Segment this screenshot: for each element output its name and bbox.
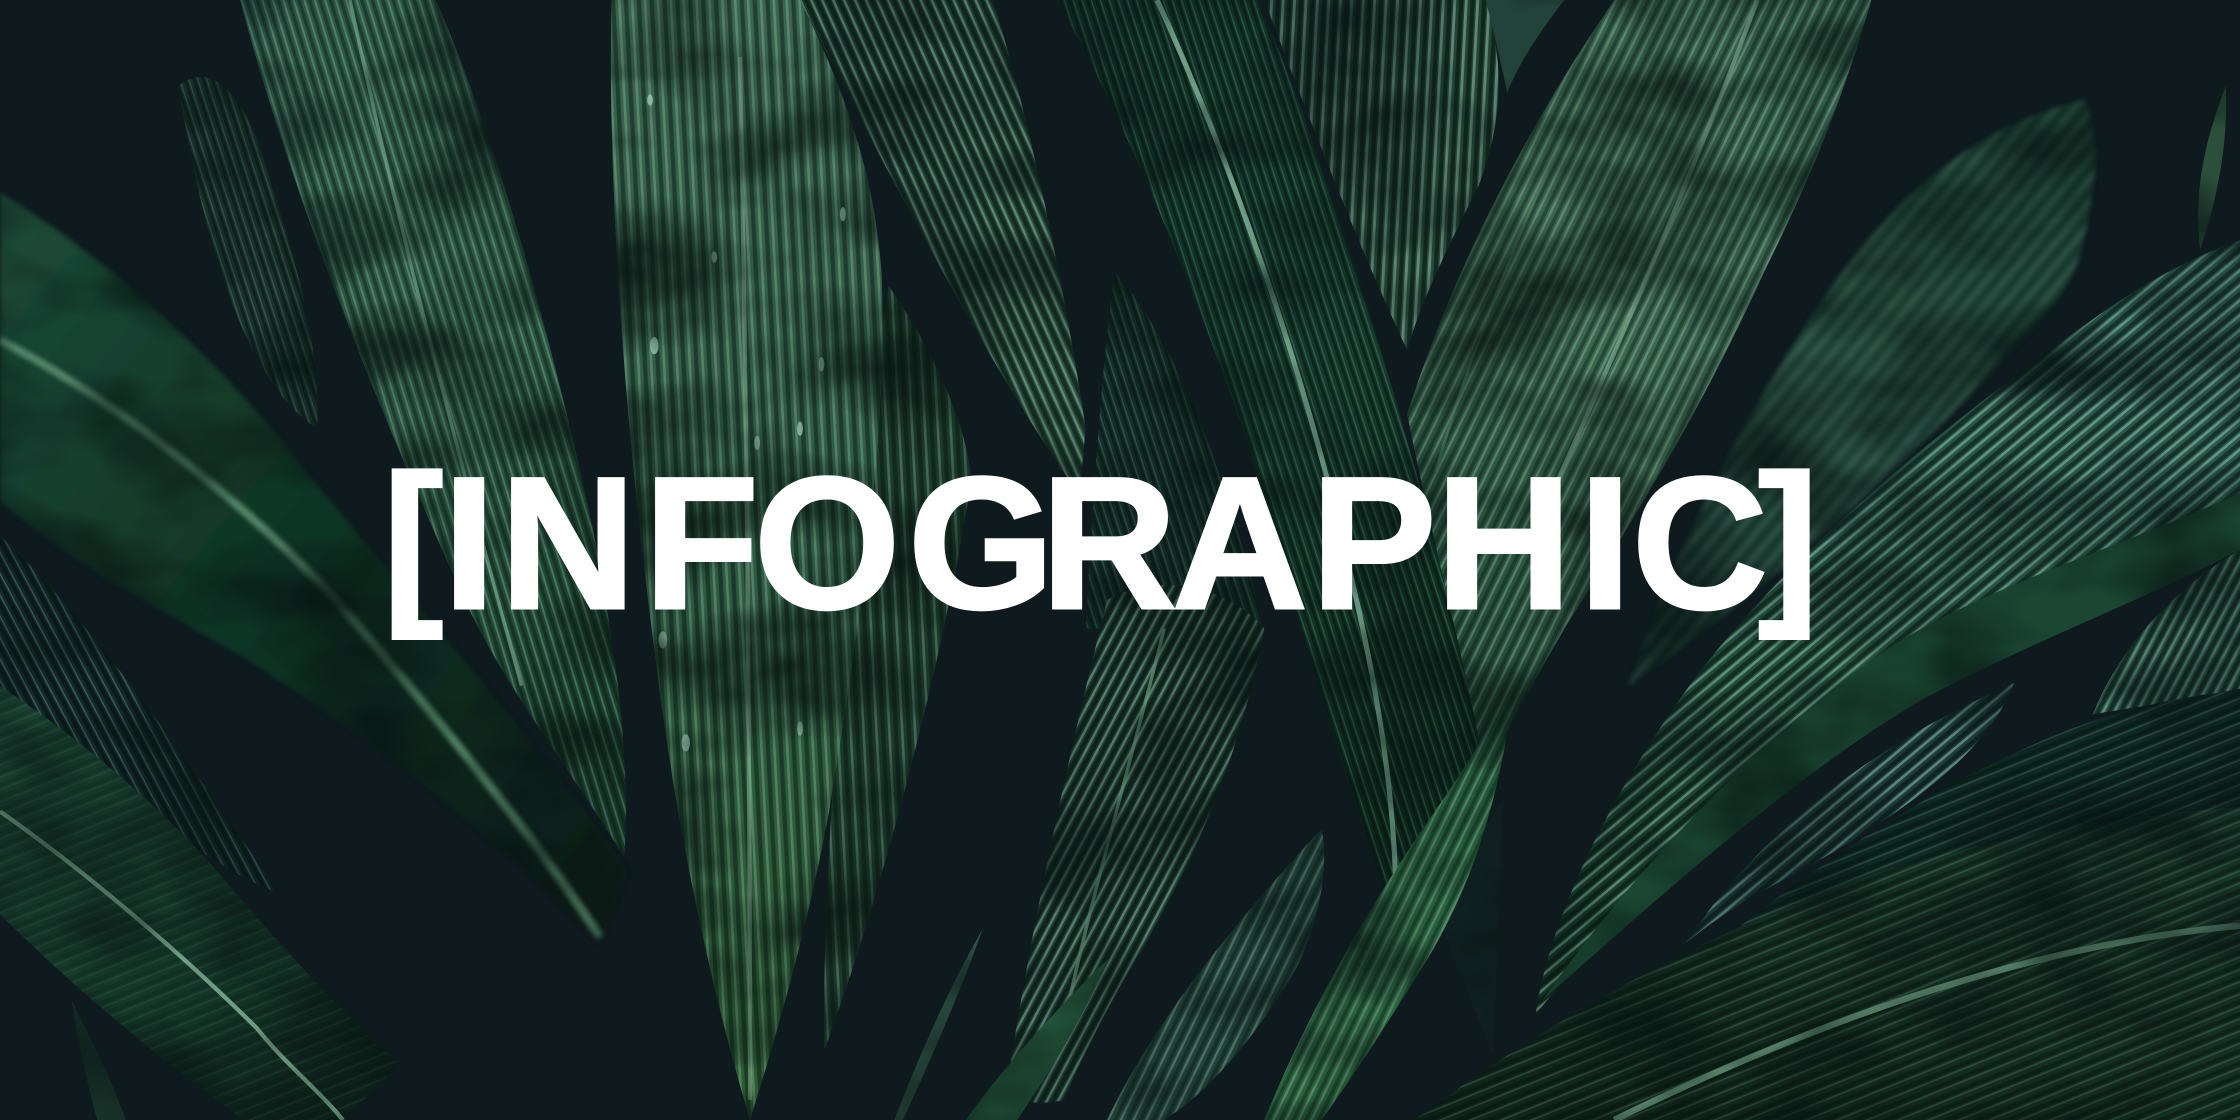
leaf: faint upper-left blade — [179, 77, 318, 429]
leaf: centre lower fan blade — [1007, 585, 1264, 1103]
leaf: bottom-right large blade — [1414, 807, 2240, 1120]
leaf: thin stem top right — [2198, 86, 2226, 250]
leaf: dark blade with light stripes, top centre — [800, 0, 1086, 493]
leaf: large left blade — [0, 193, 629, 943]
title: C — [1632, 438, 1768, 648]
leaf: large right striped blade — [1536, 240, 2240, 1014]
leaf: tall centre-left blade with droplets — [611, 0, 883, 1120]
title: N — [500, 438, 636, 648]
leaf: dark arched blade far lower right — [1686, 691, 2240, 971]
leaf: dim centre back blade — [1086, 271, 1264, 629]
leaf: bottom-left stem fragment — [71, 1000, 126, 1120]
leaf: blurred right blade — [1629, 100, 2095, 686]
title: [ — [383, 438, 443, 640]
leaf: lower centre small blade — [1107, 829, 1324, 1120]
title: H — [1436, 438, 1572, 648]
leaf: bottom-left blade — [0, 686, 400, 1120]
leaf: faint lower-left blade — [0, 536, 279, 893]
title: G — [908, 438, 1054, 648]
droplets — [647, 94, 846, 751]
title: P — [1311, 438, 1436, 648]
leaf: dim stem behind lower centre — [1429, 800, 1503, 1057]
leaf: top-right striped blade — [1264, 0, 1499, 350]
title: A — [1172, 438, 1308, 648]
leaf: thin green blade bottom centre — [966, 960, 1107, 1120]
leaf: dark blade lower right — [1686, 683, 2014, 943]
title: ] — [1758, 438, 1818, 640]
title: I — [1579, 438, 1631, 648]
title: R — [1041, 438, 1177, 648]
leaf: small far-right blade — [2093, 550, 2240, 714]
title: O — [754, 438, 900, 648]
leaf: top far-right back blade — [1486, 0, 1564, 93]
leaf: upper-left striped blade — [240, 0, 626, 857]
leaf: bright green foreground blade — [1264, 686, 1514, 1120]
leaf: large upper-right green blade — [1407, 0, 1871, 779]
title: I — [443, 438, 495, 648]
title: F — [644, 438, 759, 648]
leaf: long dark blade with bright midrib — [1057, 0, 1481, 926]
leaf: narrow dark blade behind centre — [824, 286, 971, 1050]
leaf: thin pale blade bottom centre — [894, 929, 983, 1120]
